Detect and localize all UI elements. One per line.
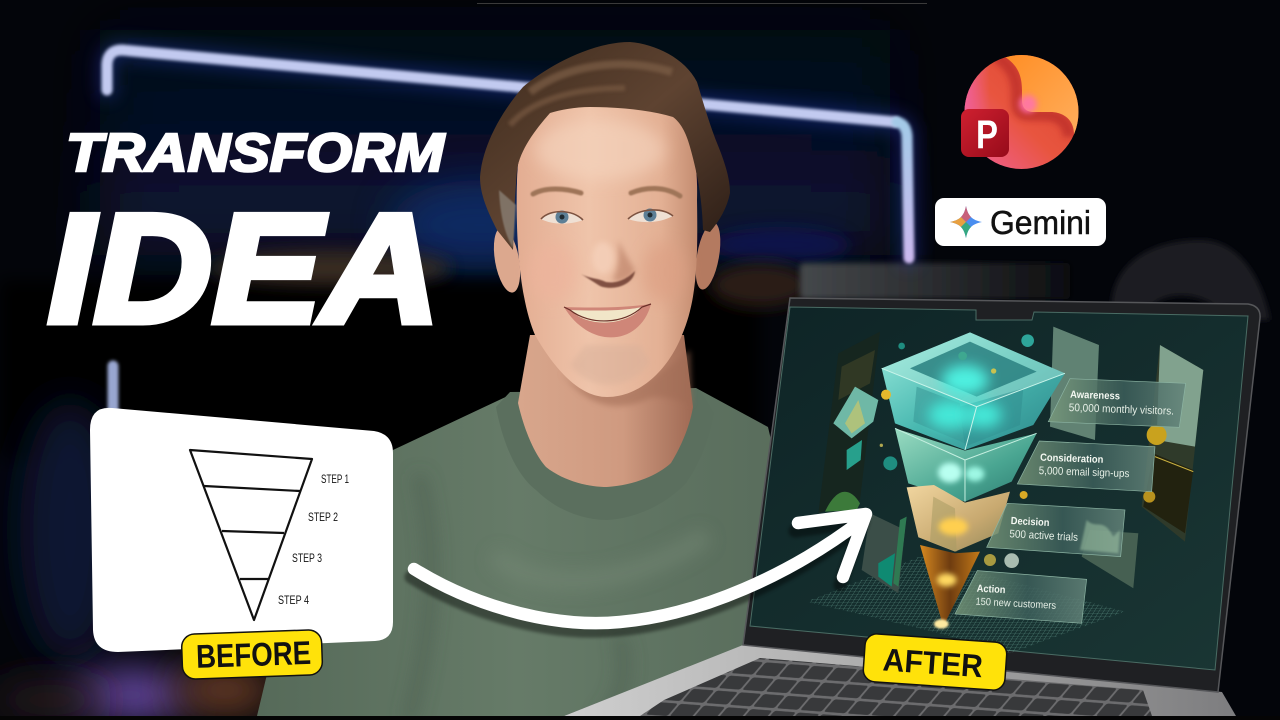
BEFORE badge: BEFORE: [195, 634, 312, 675]
face: [517, 103, 697, 397]
label: decision: 500 active trials: [1009, 528, 1079, 544]
nose: [581, 240, 635, 288]
hand-drawn funnel: [190, 450, 312, 620]
ears: [489, 225, 525, 295]
icon: Gemini star: [950, 206, 982, 238]
tier 2 consideration: [895, 428, 1037, 502]
label: decision: [987, 503, 1125, 557]
shirt: [257, 388, 778, 716]
person: [257, 42, 778, 716]
floor grid: [807, 557, 1125, 653]
neck: [518, 335, 693, 487]
label: decision: Decision: [1010, 516, 1050, 529]
title: IDEA: [48, 182, 440, 355]
step labels: [278, 472, 349, 607]
funnel scene: [807, 327, 1203, 653]
icon: PowerPoint logo: [961, 40, 1090, 169]
display: [750, 307, 1248, 670]
label: action: Action: [976, 584, 1006, 596]
step labels: STEP 2: [308, 510, 338, 524]
spheres: [880, 334, 1034, 568]
neon light tube: [107, 50, 909, 420]
collar: [496, 390, 714, 520]
label: consideration: Consideration: [1040, 453, 1104, 466]
tier 1 awareness: [882, 332, 1065, 450]
laptop: [564, 298, 1260, 716]
shirt folds: [410, 480, 700, 716]
title: [48, 123, 445, 355]
AFTER badge: [862, 633, 1008, 691]
icon: PowerPoint logo: P: [976, 113, 998, 157]
label: consideration: [1017, 441, 1155, 492]
Gemini badge: [935, 198, 1106, 246]
AFTER badge: AFTER: [882, 641, 984, 684]
bottom black strip: [0, 716, 1280, 720]
arrow: [411, 514, 866, 631]
left dashboard panel: [818, 332, 880, 513]
Gemini badge: Gemini: [990, 204, 1091, 241]
label: awareness: 50,000 monthly visitors.: [1069, 402, 1174, 418]
step labels: STEP 3: [292, 551, 322, 565]
laptop base: [564, 645, 1236, 716]
mouth: [564, 304, 651, 337]
label: consideration: 5,000 email sign-ups: [1039, 465, 1130, 480]
label: awareness: [1048, 379, 1186, 427]
laptop lid: [743, 298, 1260, 692]
eyebrows: [533, 188, 680, 196]
label: awareness: Awareness: [1070, 390, 1120, 402]
step labels: STEP 1: [321, 472, 349, 486]
label: action: [955, 571, 1087, 623]
tier 4 action: [920, 545, 980, 629]
title: TRANSFORM: [66, 123, 445, 183]
step labels: STEP 4: [278, 593, 309, 607]
tier 3 decision: [907, 485, 1010, 552]
hair: [480, 42, 730, 250]
eyes: [541, 208, 673, 224]
right panels: [862, 327, 1203, 593]
label: action: 150 new customers: [975, 597, 1056, 612]
before card: [90, 408, 393, 652]
